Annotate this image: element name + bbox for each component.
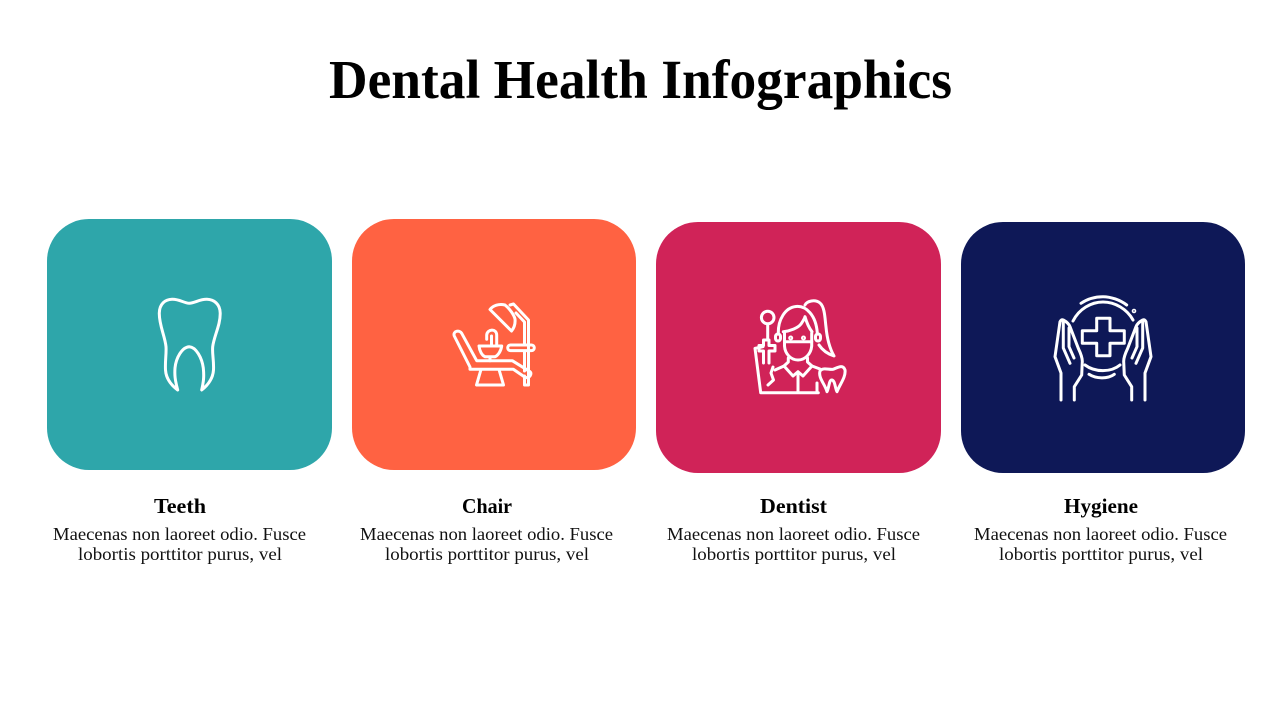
text: dentist description: lobortis porttitor purus, vel bbox=[692, 544, 896, 564]
card: orange bbox=[352, 219, 636, 470]
card: navy bbox=[961, 222, 1245, 473]
text: dentist description bbox=[667, 524, 920, 564]
icon: dentist with mirror and tooth bbox=[755, 301, 845, 393]
text: hygiene description: Maecenas non laoreet odio. Fusce bbox=[974, 524, 1227, 544]
icon: tooth bbox=[159, 299, 220, 390]
icon: dental chair bbox=[454, 304, 534, 385]
heading: hygiene: Hygiene bbox=[1064, 494, 1138, 518]
panel: teeth bbox=[47, 219, 332, 564]
text: teeth description: lobortis porttitor purus, vel bbox=[78, 544, 282, 564]
icon: hands holding medical cross bbox=[1055, 297, 1151, 400]
panel: dentist bbox=[656, 222, 941, 564]
heading: dentist: Dentist bbox=[760, 494, 827, 518]
card: teal bbox=[47, 219, 332, 470]
text: teeth description bbox=[53, 524, 306, 564]
text: chair description: Maecenas non laoreet odio. Fusce bbox=[360, 524, 613, 544]
text: chair description bbox=[360, 524, 613, 564]
text: teeth description: Maecenas non laoreet odio. Fusce bbox=[53, 524, 306, 544]
panel: chair bbox=[352, 219, 636, 564]
panel: hygiene bbox=[961, 222, 1245, 564]
text: hygiene description bbox=[974, 524, 1227, 564]
text: dentist description: Maecenas non laoreet odio. Fusce bbox=[667, 524, 920, 544]
text: hygiene description: lobortis porttitor purus, vel bbox=[999, 544, 1203, 564]
text: chair description: lobortis porttitor purus, vel bbox=[385, 544, 589, 564]
heading: teeth: Teeth bbox=[154, 494, 206, 518]
card: crimson bbox=[656, 222, 941, 473]
title: Dental Health Infographics bbox=[329, 49, 952, 110]
heading: chair: Chair bbox=[462, 494, 512, 518]
